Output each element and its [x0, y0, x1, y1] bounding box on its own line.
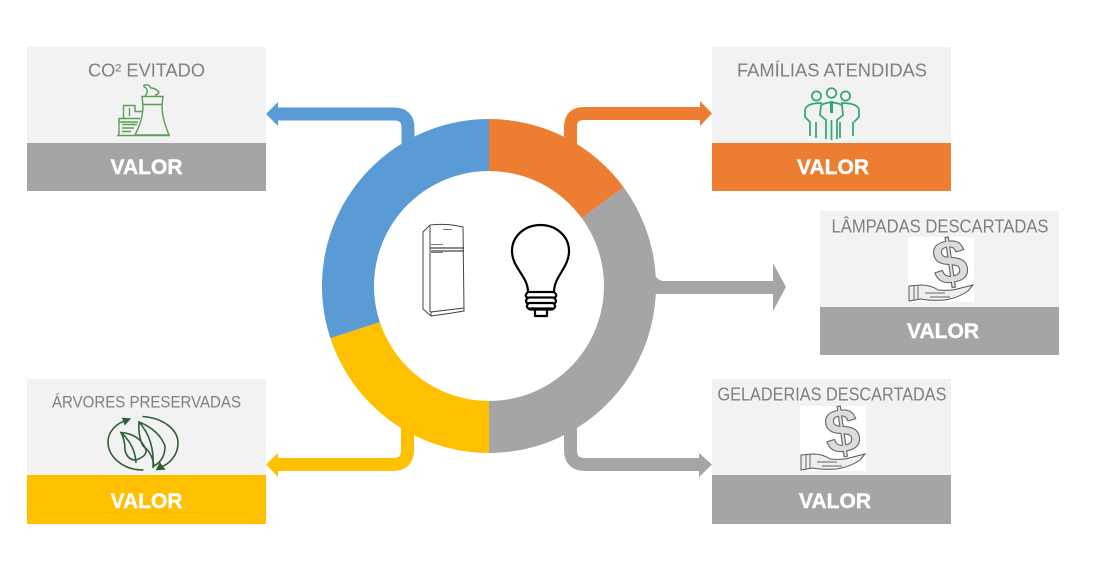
icon: leaves with cycle arrows — [108, 416, 178, 470]
heading: LÂMPADAS DESCARTADAS — [832, 216, 1048, 236]
panel: CO2 avoided — [27, 47, 266, 191]
icon: people group — [805, 88, 859, 140]
segment: blue — [322, 119, 489, 338]
bar: value — [27, 143, 266, 191]
arrow: gray to refrigerators panel — [570, 420, 712, 477]
bar: value — [712, 475, 951, 524]
segment: yellow — [330, 322, 489, 453]
donut chart — [322, 119, 656, 453]
icon: dollar in hand — [908, 226, 974, 302]
heading: GELADERIAS DESCARTADAS — [718, 384, 946, 404]
heading: FAMÍLIAS ATENDIDAS — [737, 60, 927, 80]
icon: power plant — [117, 85, 170, 136]
arrow: yellow to trees panel — [266, 420, 408, 477]
segment: orange — [489, 119, 624, 218]
value label: VALOR — [797, 156, 869, 179]
heading: ÁRVORES PRESERVADAS — [52, 392, 241, 412]
value label: VALOR — [110, 156, 182, 179]
value label: VALOR — [110, 490, 182, 513]
arrow: orange to families panel — [570, 101, 712, 155]
icon: refrigerator — [423, 224, 464, 316]
value label: VALOR — [907, 320, 979, 343]
segment: gray — [489, 187, 656, 453]
icon: dollar in hand — [800, 395, 866, 471]
bar: value — [27, 475, 266, 524]
panel: trees preserved — [27, 379, 266, 524]
icon: dollar in hand: $ — [820, 395, 864, 468]
bar: value — [820, 307, 1059, 355]
icon: light bulb — [512, 225, 569, 316]
bar: value — [712, 143, 951, 191]
value label: VALOR — [799, 490, 871, 513]
heading: CO² EVITADO — [88, 60, 205, 80]
icon: dollar in hand: $ — [928, 226, 972, 299]
arrow: gray to lamps panel — [645, 263, 786, 311]
panel: families served — [712, 47, 951, 191]
panel: refrigerators discarded — [712, 379, 951, 524]
arrow: blue to CO2 panel — [266, 102, 408, 155]
panel: lamps discarded — [820, 211, 1059, 355]
